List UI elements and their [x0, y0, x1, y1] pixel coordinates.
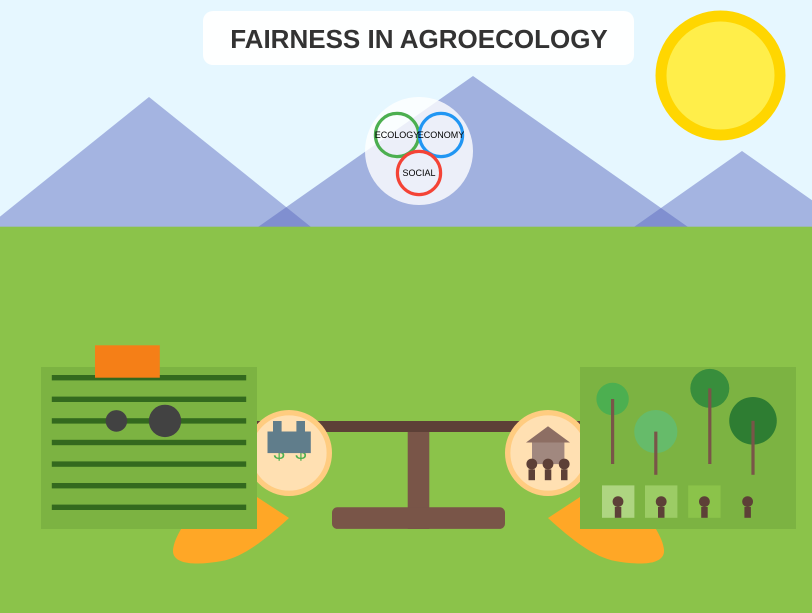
- farmer 3 head: [699, 496, 710, 507]
- scale post: [408, 432, 429, 529]
- balance scale: [257, 421, 580, 529]
- left pan circle: [249, 413, 329, 493]
- crop rows: [52, 375, 246, 510]
- farmer 1 head: [613, 496, 623, 507]
- farmer 2 body: [658, 507, 664, 518]
- title banner: [203, 11, 634, 65]
- orange machine: [95, 345, 160, 378]
- field background: [41, 367, 257, 529]
- farmer 1 body: [615, 507, 621, 518]
- social circle: [397, 151, 441, 195]
- sun: [661, 16, 780, 135]
- centre mountain: [258, 76, 688, 227]
- ecology circle: [375, 113, 419, 157]
- scale beam: [257, 421, 580, 432]
- crop row 2: [52, 397, 246, 402]
- crop plot 1: [602, 485, 634, 518]
- tree 4 canopy: [729, 397, 777, 445]
- right pan: community: [508, 413, 588, 493]
- crop plot 2: [645, 485, 677, 518]
- right pan circle: [508, 413, 588, 493]
- left chimney: [273, 421, 282, 432]
- ground: [0, 227, 812, 613]
- crop row 5: [52, 461, 246, 467]
- person 3 body: [561, 469, 568, 480]
- scale base: [332, 507, 505, 529]
- factory: [268, 421, 311, 453]
- title: FAIRNESS IN AGROECOLOGY: [230, 24, 608, 54]
- left pan: industry: [249, 413, 329, 493]
- tree 1 trunk: [611, 399, 614, 464]
- tree 2: [634, 410, 677, 475]
- tree 3 trunk: [708, 388, 711, 464]
- left mountain: [0, 97, 311, 227]
- tree 2 canopy: [634, 410, 677, 453]
- person 2 body: [545, 469, 551, 480]
- economy label: ECONOMY: [418, 130, 464, 140]
- crop row 6: [52, 483, 246, 488]
- farmers: [613, 496, 753, 518]
- crop row 3: [52, 418, 246, 424]
- tree 2 trunk: [654, 432, 657, 475]
- large dark wheel: [149, 405, 181, 437]
- person 3 head: [559, 459, 570, 469]
- sky background: [0, 0, 812, 227]
- farmer 3 body: [701, 507, 708, 518]
- social label: SOCIAL: [402, 168, 436, 178]
- right orange hand: [548, 497, 664, 564]
- tree 4 trunk: [751, 421, 755, 475]
- crop row 1: [52, 375, 246, 380]
- economy circle: [419, 113, 463, 157]
- farmer 4 head: [742, 496, 753, 507]
- crop plot 3: [688, 485, 721, 518]
- person 1 head: [526, 459, 537, 469]
- venn backdrop: [365, 97, 473, 205]
- small dark wheel: [106, 410, 127, 432]
- dollar sign right: $: [295, 442, 306, 464]
- panel: monoculture field: [41, 345, 257, 529]
- crop row 4: [52, 440, 246, 445]
- panel: agroforestry field: [580, 367, 796, 529]
- title background: [203, 11, 634, 65]
- tree 1: [596, 383, 629, 464]
- person 2 head: [543, 459, 553, 469]
- community people: [526, 459, 570, 480]
- ecology label: ECOLOGY: [375, 130, 419, 140]
- crop row 7: [52, 505, 246, 510]
- dollar sign left: $: [273, 442, 285, 464]
- mountains: [0, 76, 812, 227]
- tree 3: [690, 369, 729, 464]
- right chimney: [296, 421, 305, 432]
- farmer 4 body: [744, 507, 751, 518]
- tree 3 canopy: [690, 369, 729, 408]
- right mountain: [634, 151, 812, 227]
- house roof: [526, 426, 570, 442]
- tree 4: [729, 397, 777, 475]
- factory building: [268, 432, 311, 453]
- house wall: [532, 442, 564, 464]
- venn diagram: ecology, economy, social: [365, 97, 473, 205]
- forest field background: [580, 367, 796, 529]
- left orange hand: [173, 497, 289, 564]
- person 1 body: [528, 469, 535, 480]
- tree 1 canopy: [596, 383, 629, 415]
- farmer 2 head: [656, 496, 667, 507]
